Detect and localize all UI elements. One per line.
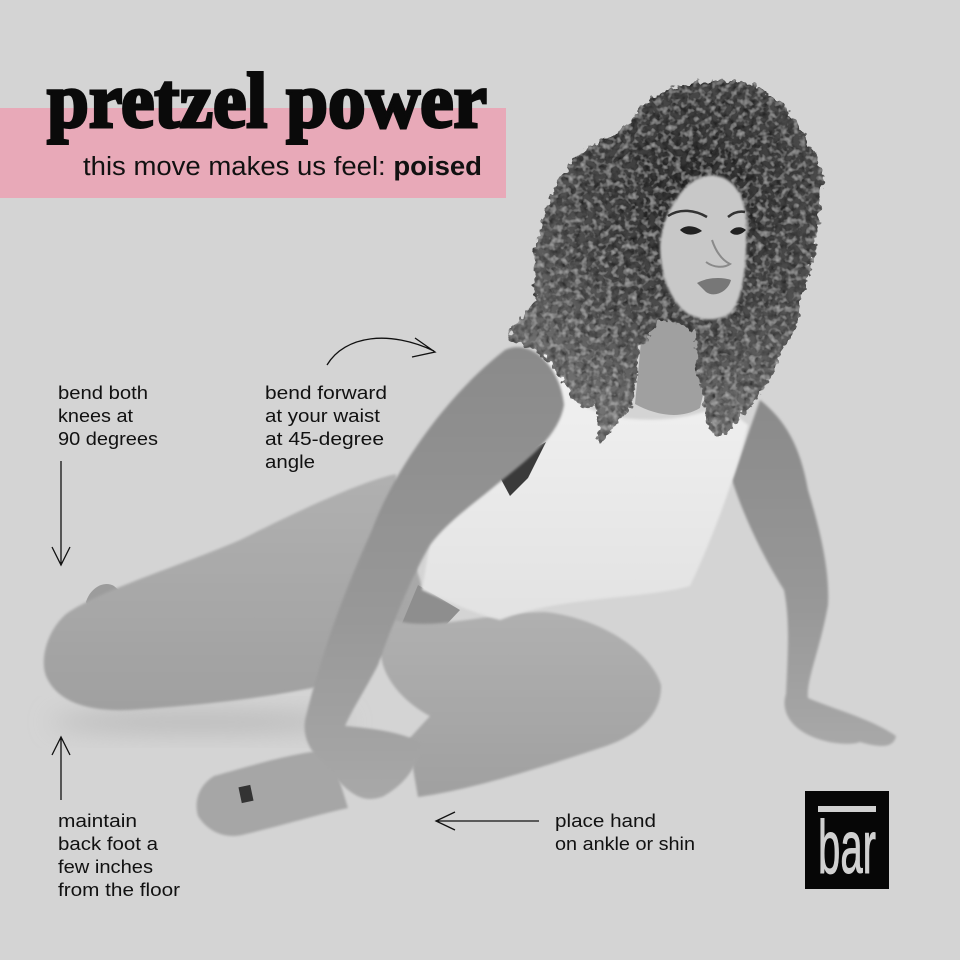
eyebrows (668, 211, 745, 217)
label: bend forward: at your waist (265, 406, 380, 426)
sock tag (238, 785, 254, 803)
sock (197, 750, 348, 836)
label: place hand (555, 811, 695, 854)
eyes (680, 226, 746, 235)
pink title band (0, 108, 506, 198)
label: place hand: on ankle or shin (555, 834, 695, 854)
label: place hand: place hand (555, 811, 656, 831)
label: maintain back foot: back foot a (58, 834, 159, 854)
label: maintain back foot (58, 811, 180, 900)
nose (706, 240, 730, 267)
photo: woman in pretzel stretch (44, 81, 896, 836)
label: maintain back foot: maintain (58, 811, 137, 831)
logo: bar: bar (818, 805, 876, 889)
label: bend both knees: knees at (58, 406, 133, 426)
sports bra detail (496, 442, 546, 496)
hair (508, 81, 824, 445)
arrow: up (52, 737, 70, 800)
label: maintain back foot: from the floor (58, 880, 180, 900)
left arm and hand on ankle (305, 347, 564, 799)
front thigh and shin (381, 612, 661, 797)
subtitle: this move makes us feel: poised (83, 153, 482, 181)
label: bend forward (265, 383, 387, 472)
shorts shadow (395, 585, 460, 640)
label: bend both knees: bend both (58, 383, 148, 403)
label: bend forward: bend forward (265, 383, 387, 403)
back foot (86, 584, 130, 612)
title: pretzel power (47, 57, 487, 144)
lips (697, 278, 731, 294)
label: bend both knees (58, 383, 158, 449)
tank top (392, 342, 748, 620)
logo: bar (805, 791, 889, 889)
label: bend forward: at 45-degree (265, 429, 384, 449)
right arm and hand on floor (732, 400, 896, 746)
neck (635, 300, 720, 415)
label: bend both knees: 90 degrees (58, 429, 158, 449)
back leg (44, 474, 422, 710)
arrow: down (52, 461, 70, 565)
arrow: left (436, 812, 539, 830)
floor shadow (50, 712, 350, 732)
face (660, 175, 746, 320)
label: bend forward: angle (265, 452, 315, 472)
arrow: curved (327, 338, 435, 365)
label: maintain back foot: few inches (58, 857, 153, 877)
